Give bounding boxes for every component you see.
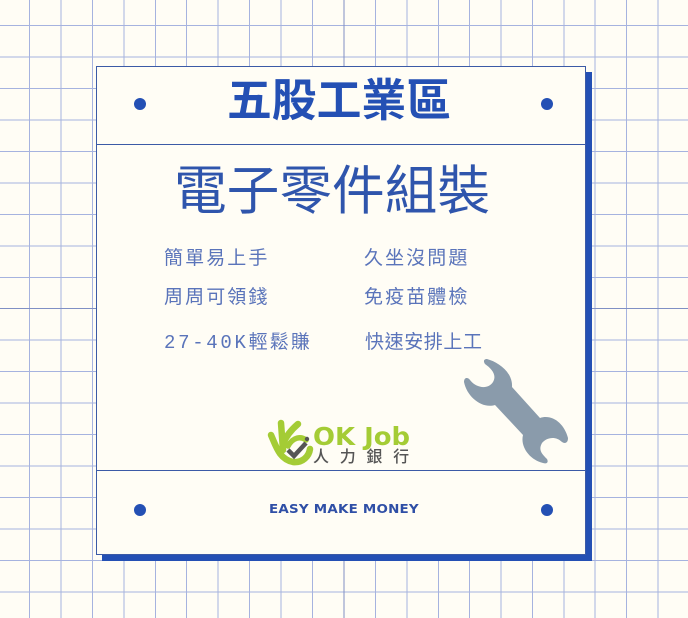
item: no vaccine check: 免疫苗體檢 xyxy=(364,287,470,309)
subtitle: 電子零件組裝 xyxy=(174,162,490,221)
item: sitting ok: 久坐沒問題 xyxy=(364,248,470,270)
item: easy to start: 簡單易上手 xyxy=(164,248,270,270)
dot top right xyxy=(541,98,553,110)
dot top left xyxy=(134,98,146,110)
icon: hand xyxy=(271,423,310,462)
logo wordmark: OK Job xyxy=(313,422,410,451)
dot bottom left xyxy=(134,504,146,516)
footer divider xyxy=(96,470,586,471)
footer text: EASY MAKE MONEY xyxy=(269,501,419,516)
icon: wrench xyxy=(464,359,568,464)
item: weekly pay: 周周可領錢 xyxy=(164,287,270,309)
header divider xyxy=(96,144,586,145)
item: salary: 27-40K輕鬆賺 xyxy=(164,332,312,354)
item: quick start: 快速安排上工 xyxy=(365,332,483,354)
title: 五股工業區 xyxy=(227,76,451,126)
main panel xyxy=(96,66,586,555)
panel shadow xyxy=(102,72,592,561)
dot bottom right xyxy=(541,504,553,516)
logo: OK Job xyxy=(268,420,415,466)
